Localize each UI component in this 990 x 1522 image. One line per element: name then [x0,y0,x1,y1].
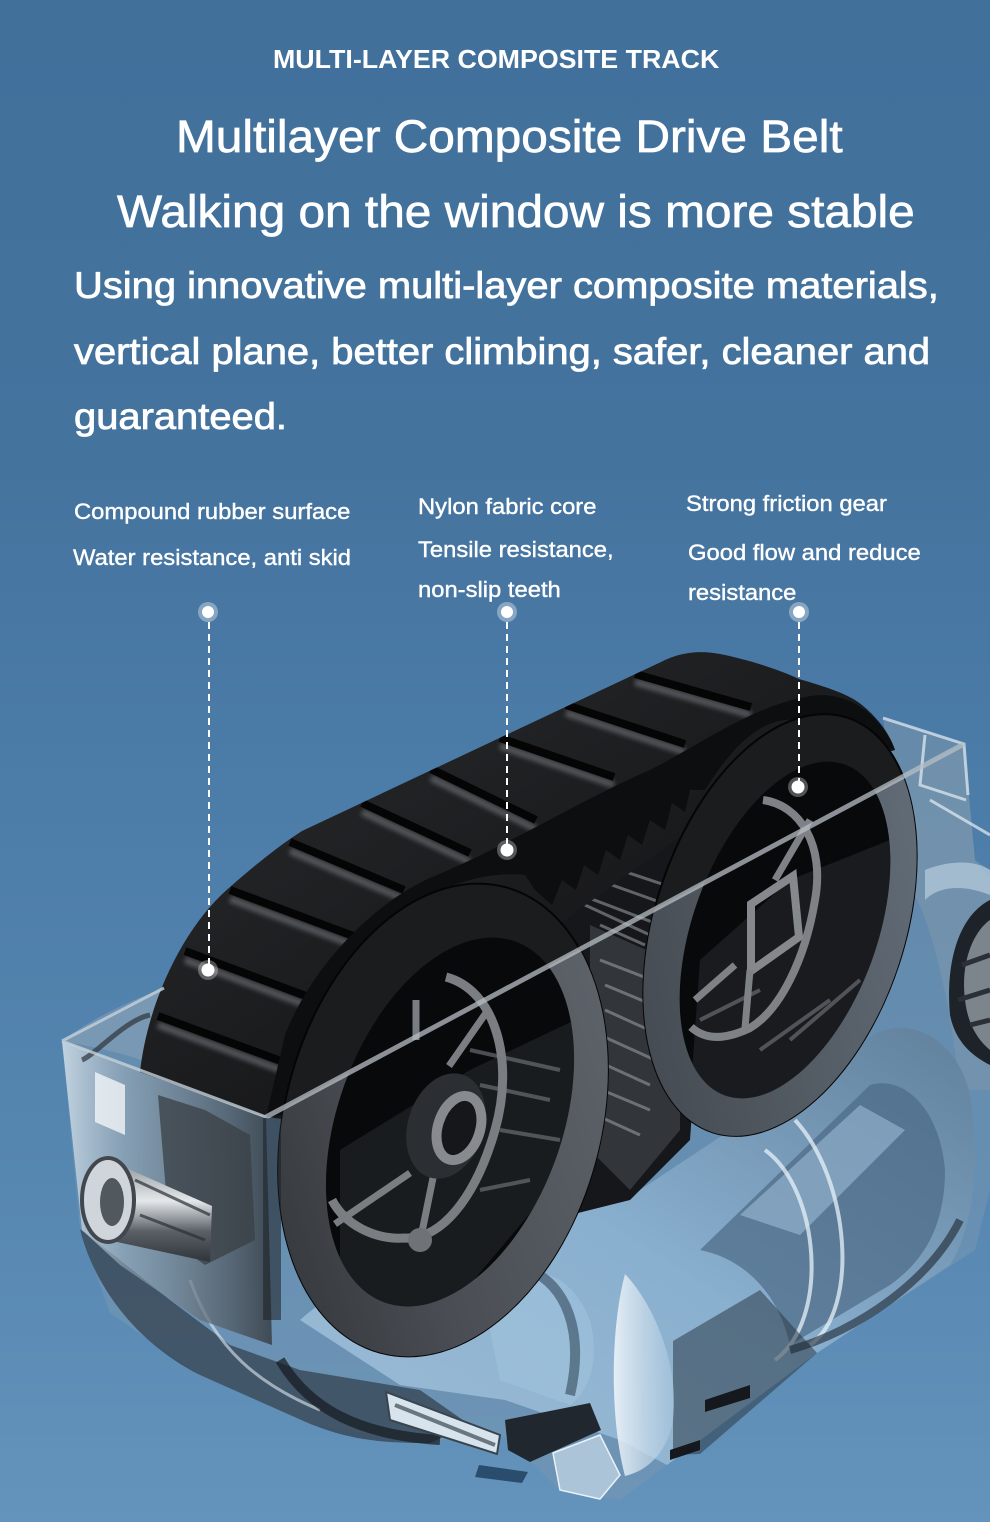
leader: compound rubber surface [198,602,218,980]
callout text: nylon fabric core: non-slip teeth [418,577,561,602]
callout text: compound rubber surface [72,499,351,570]
callout text: nylon fabric core [418,494,614,602]
motor cylinder [300,1028,975,1476]
black composite belt [140,652,895,1120]
lower glass housing [62,744,990,1500]
leader: strong friction gear [788,602,809,797]
eyebrow title: MULTI-LAYER COMPOSITE TRACK [273,44,719,74]
description paragraph [74,264,939,437]
left wheel [277,882,609,1358]
description paragraph: guaranteed. [74,395,287,437]
left side housing and axle [62,988,272,1345]
description paragraph: vertical plane, better climbing, safer, cleaner and [74,330,930,372]
callout text: compound rubber surface: Water resistance, anti skid [73,545,351,570]
main heading [116,111,915,237]
product illustration: transparent track module [61,652,990,1500]
callout text: compound rubber surface: Compound rubber surface [74,499,350,524]
right wheel [642,714,918,1137]
right wheel internal blades [690,840,890,1120]
gears between wheels [520,780,703,1215]
callout text: nylon fabric core: Tensile resistance, [418,537,614,562]
left wheel internal blades [340,1020,575,1320]
callout text: strong friction gear [686,491,921,605]
callout text: strong friction gear: Good flow and reduce [688,540,921,565]
callout text: nylon fabric core: Nylon fabric core [418,494,596,519]
right side mechanical parts [883,718,990,1090]
main heading: Walking on the window is more stable [117,186,915,237]
belt tread grooves [158,674,751,1061]
glass housing front edge [62,744,964,1320]
description paragraph: Using innovative multi-layer composite materials, [74,264,939,306]
leader: nylon fabric core [497,602,517,860]
belt tread glossy highlights [158,682,751,1070]
callout text: strong friction gear: Strong friction gear [686,491,887,516]
bottom clip assembly [386,1392,620,1499]
callout text: strong friction gear: resistance [688,580,796,605]
belt side face with teeth [266,695,895,1117]
main heading: Multilayer Composite Drive Belt [176,111,843,162]
